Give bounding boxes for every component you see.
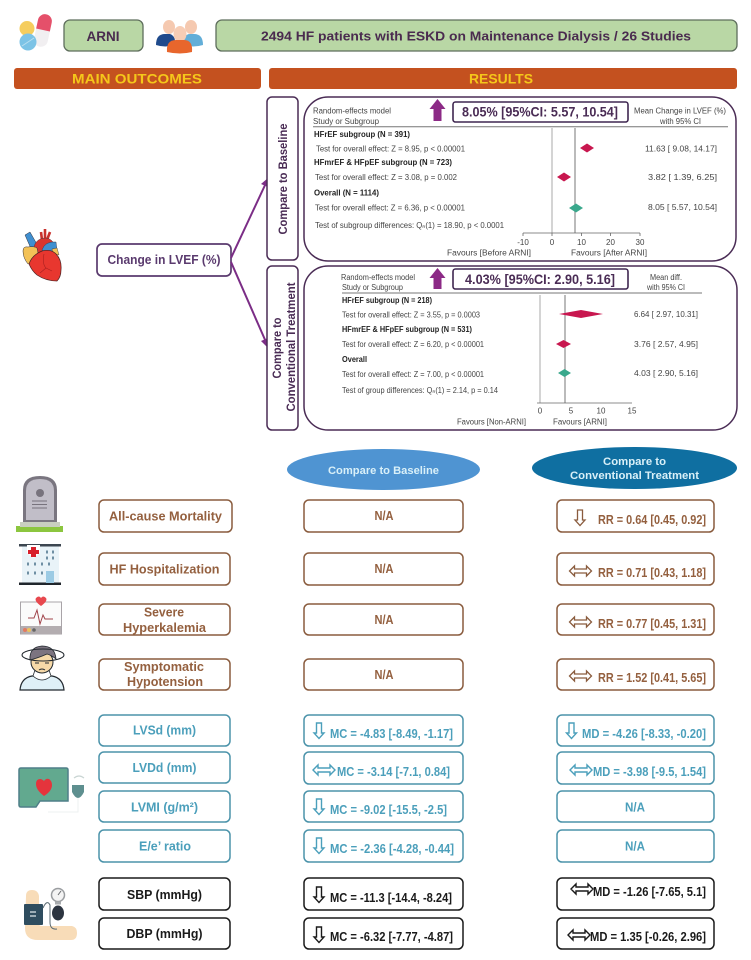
forest plot table text: Test of subgroup differences: Qₙ(1) = 18.90, p < 0.0001: [315, 221, 505, 230]
heading: results: RESULTS: [469, 70, 533, 86]
forest plot chart: 0: [550, 238, 555, 247]
forest plot table text conventional: Mean diff.: [650, 273, 682, 282]
heading: main outcomes: MAIN OUTCOMES: [72, 70, 202, 86]
row: LVMI: N/A: [625, 800, 645, 814]
forest plot chart: Favours [After ARNI]: [571, 248, 647, 258]
forest plot table text conventional: with 95% CI: [646, 283, 685, 292]
row: symptomatic hypotension: [99, 659, 714, 690]
label: compare to conventional treatment: Conventional Treatment: [286, 282, 298, 412]
row: HF hospitalization: N/A: [374, 562, 394, 576]
forest plot chart conventional: 0: [538, 406, 543, 416]
icon: hospital: [19, 544, 61, 585]
row: HF hospitalization: [99, 553, 714, 585]
forest plot table text conventional: 3.76 [ 2.57, 4.95]: [634, 340, 698, 349]
forest plot table text: Test for overall effect: Z = 6.36, p < 0.00001: [315, 204, 466, 212]
forest plot table text: [313, 106, 726, 230]
forest plot chart: 10: [577, 238, 586, 247]
icon: heart: [23, 229, 61, 281]
heading: main outcomes: [14, 68, 261, 89]
label: compare to baseline: Compare to Baseline: [278, 124, 290, 234]
forest plot table text conventional: Random-effects model: [341, 273, 415, 282]
forest plot table text: HFrEF subgroup (N = 391): [314, 130, 410, 139]
row: LVDd: LVDd (mm): [132, 761, 196, 775]
row: severe hyperkalemia: N/A: [374, 613, 394, 627]
icon: echocardiogram: [19, 768, 84, 812]
forest plot chart conventional: [457, 295, 637, 426]
forest plot table text: Study or Subgroup: [313, 117, 380, 126]
forest plot table text: 11.63 [ 9.08, 14.17]: [645, 144, 717, 154]
forest plot table text conventional: HFrEF subgroup (N = 218): [342, 296, 432, 305]
forest plot table text conventional: 4.03 [ 2.90, 5.16]: [634, 369, 698, 378]
row: E/e' ratio: MC = -2.36 [-4.28, -0.44]: [330, 842, 454, 856]
forest plot table text conventional: Test for overall effect: Z = 3.55, p = 0.0003: [342, 310, 480, 320]
row: DBP: MC = -6.32 [-7.77, -4.87]: [330, 930, 453, 944]
row: HF hospitalization: HF Hospitalization: [110, 562, 220, 576]
forest plot table text: 3.82 [ 1.39, 6.25]: [648, 173, 717, 182]
arrow: to compare to conventional treatment: [231, 262, 268, 348]
forest plot chart conventional: 10: [597, 406, 606, 416]
row: symptomatic hypotension: RR = 1.52 [0.41, 5.65]: [598, 671, 706, 685]
row: severe hyperkalemia: RR = 0.77 [0.45, 1.31]: [598, 617, 706, 631]
ARNI box: ARNI: [86, 29, 120, 44]
forest plot table text conventional: Test of group differences: Qₙ(1) = 2.14, p = 0.14: [342, 386, 498, 395]
forest plot table text conventional: HFmrEF & HFpEF subgroup (N = 531): [342, 325, 472, 334]
callout: pooled mean difference: 4.03% [95%CI: 2.90, 5.16]: [465, 271, 615, 287]
forest plot table text conventional: Test for overall effect: Z = 6.20, p < 0.00001: [342, 340, 484, 349]
row: LVMI: [99, 791, 714, 822]
label: compare to conventional treatment: [267, 266, 298, 430]
row: E/e' ratio: N/A: [625, 840, 645, 854]
forest plot chart: 20: [606, 238, 615, 247]
row: LVSd: MD = -4.26 [-8.33, -0.20]: [582, 727, 706, 741]
row: SBP: [99, 878, 714, 910]
forest plot table text: HFmrEF & HFpEF subgroup (N = 723): [314, 158, 452, 167]
row: LVDd: MC = -3.14 [-7.1, 0.84]: [337, 765, 450, 779]
outcome box: change in LVEF: [97, 244, 231, 276]
row: DBP: [99, 918, 714, 949]
row: DBP: MD = 1.35 [-0.26, 2.96]: [590, 930, 706, 944]
row: SBP: SBP (mmHg): [127, 888, 202, 902]
panel: forest plot compare to baseline: [304, 97, 736, 261]
forest plot chart conventional: 5: [569, 406, 574, 416]
row: symptomatic hypotension: Symptomatic: [124, 660, 204, 674]
row: symptomatic hypotension: Hypotension: [127, 675, 203, 689]
forest plot table text conventional: Overall: [342, 355, 367, 364]
forest plot table text: Test for overall effect: Z = 3.08, p = 0.002: [315, 173, 458, 182]
forest plot table text: Test for overall effect: Z = 8.95, p < 0.00001: [316, 144, 466, 154]
ARNI box: [64, 20, 143, 51]
icon: pills: [20, 13, 53, 50]
forest plot chart conventional: Favours [Non-ARNI]: [457, 418, 526, 426]
forest plot chart conventional: Favours [ARNI]: [553, 418, 607, 426]
forest plot table text conventional: 6.64 [ 2.97, 10.31]: [634, 310, 698, 319]
arrow: LVEF increase vs conventional: [430, 268, 446, 289]
row: HF hospitalization: RR = 0.71 [0.43, 1.18]: [598, 566, 706, 580]
icon: tombstone: [16, 476, 63, 532]
row: LVSd: LVSd (mm): [133, 724, 196, 738]
icon: dizzy person: [20, 646, 64, 690]
icon: heart monitor: [20, 596, 62, 634]
row: all-cause mortality: All-cause Mortality: [109, 510, 222, 524]
label: compare to conventional treatment: Compare to: [272, 318, 284, 378]
column header: compare to conventional treatment: Conventional Treatment: [570, 470, 699, 482]
row: E/e' ratio: E/e’ ratio: [139, 840, 191, 854]
heading: results: [269, 68, 737, 89]
arrow: to compare to baseline: [231, 178, 268, 258]
row: LVDd: MD = -3.98 [-9.5, 1.54]: [593, 765, 706, 779]
forest plot chart: -10: [517, 238, 529, 247]
row: severe hyperkalemia: [99, 604, 714, 635]
column header: compare to conventional treatment: [532, 447, 737, 489]
row: symptomatic hypotension: N/A: [374, 668, 394, 682]
forest plot chart: Favours [Before ARNI]: [447, 248, 531, 258]
forest plot table text: Mean Change in LVEF (%): [634, 106, 726, 116]
icon: patients group: [156, 20, 203, 54]
forest plot table text: 8.05 [ 5.57, 10.54]: [648, 203, 717, 212]
arrow: LVEF increase: [430, 99, 446, 121]
forest plot table text: Overall (N = 1114): [314, 188, 379, 198]
column header: compare to conventional treatment: Compare to: [603, 456, 666, 468]
row: all-cause mortality: [99, 500, 714, 532]
forest plot table text conventional: Study or Subgroup: [342, 283, 403, 292]
forest plot chart conventional: 15: [628, 406, 637, 416]
column header: compare to baseline: Compare to Baseline: [328, 465, 439, 477]
row: SBP: MC = -11.3 [-14.4, -8.24]: [330, 891, 452, 905]
forest plot table text: with 95% CI: [659, 117, 701, 126]
row: all-cause mortality: RR = 0.64 [0.45, 0.92]: [598, 513, 706, 527]
icon: blood pressure cuff: [24, 888, 77, 940]
forest plot chart: [447, 128, 647, 258]
outcome box: change in LVEF: Change in LVEF (%): [108, 253, 220, 267]
row: E/e' ratio: [99, 830, 714, 862]
row: all-cause mortality: N/A: [374, 509, 394, 523]
row: LVMI: MC = -9.02 [-15.5, -2.5]: [330, 803, 447, 817]
forest plot table text conventional: Test for overall effect: Z = 7.00, p < 0.00001: [342, 370, 484, 379]
row: DBP: DBP (mmHg): [126, 927, 202, 941]
row: severe hyperkalemia: Severe: [144, 606, 184, 620]
column header: compare to baseline: [287, 449, 480, 490]
label: compare to baseline: [267, 97, 298, 260]
row: LVMI: LVMI (g/m²): [131, 800, 198, 814]
callout: pooled LVEF change: 8.05% [95%CI: 5.57, 10.54]: [462, 104, 618, 120]
row: severe hyperkalemia: Hyperkalemia: [123, 621, 207, 635]
row: SBP: MD = -1.26 [-7.65, 5.1]: [593, 885, 706, 899]
forest plot table text conventional: [341, 273, 698, 395]
study population box: [216, 20, 737, 51]
study population box: 2494 HF patients with ESKD on Maintenance Dialysis / 26 Studies: [261, 28, 691, 44]
row: LVDd: [99, 752, 714, 784]
row: LVSd: MC = -4.83 [-8.49, -1.17]: [330, 727, 453, 741]
forest plot chart: 30: [636, 238, 645, 247]
row: LVSd: [99, 715, 714, 746]
forest plot table text: Random-effects model: [313, 106, 391, 116]
panel: forest plot compare to conventional treatment: [304, 266, 737, 430]
